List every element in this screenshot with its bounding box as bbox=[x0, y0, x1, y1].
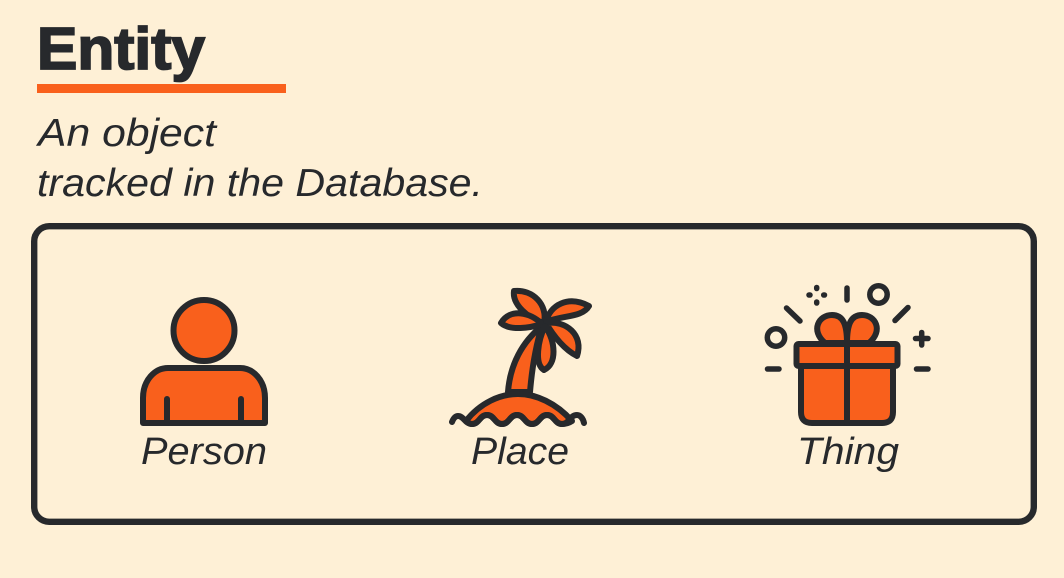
subtitle text bbox=[36, 112, 483, 205]
icon: person bbox=[143, 300, 265, 423]
label: place: Place bbox=[471, 431, 569, 473]
title underline bbox=[37, 84, 286, 93]
panel border bbox=[34, 226, 1034, 522]
panel: entity examples bbox=[34, 226, 1034, 522]
label: thing: Thing bbox=[797, 431, 899, 473]
subtitle text: tracked in the Database. bbox=[37, 162, 483, 205]
label: person: Person bbox=[141, 431, 267, 473]
icon: gift box bbox=[767, 286, 928, 423]
subtitle text: An object bbox=[36, 112, 218, 155]
title: Entity bbox=[37, 16, 205, 82]
icon: palm tree island bbox=[452, 291, 589, 424]
